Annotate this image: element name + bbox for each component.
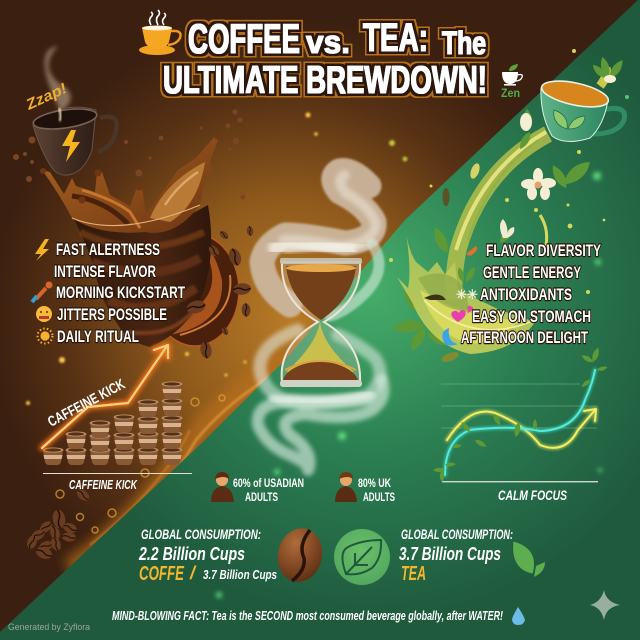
global consumption: tea — [399, 527, 513, 585]
steam above coffee cup — [44, 46, 71, 112]
drifting leaves — [469, 162, 481, 180]
title line one — [188, 15, 486, 62]
icon: face — [36, 306, 52, 322]
title line one: vs. — [306, 24, 350, 60]
right benefits list: GENTLE ENERGY — [483, 263, 581, 282]
stat: USA adults — [211, 472, 304, 504]
coffee droplets — [13, 109, 245, 199]
swirl disc — [151, 234, 239, 346]
global consumption: coffee: COFFE — [139, 563, 184, 585]
intense flavor: INTENSE FLAVOR — [54, 262, 156, 281]
global consumption: coffee: 2.2 Billion Cups — [138, 544, 245, 564]
icon: sparkles: ✳✳ — [456, 287, 478, 302]
stat: USA adults: ADULTS — [245, 490, 278, 504]
left benefits list: JITTERS POSSIBLE — [57, 305, 167, 324]
smoke swirl behind hourglass — [258, 171, 384, 470]
front smoke band over base — [272, 246, 370, 401]
rising arrow — [42, 345, 168, 448]
calm focus chart — [433, 347, 608, 503]
global consumption: coffee: GLOBAL CONSUMPTION: — [141, 526, 261, 542]
title — [163, 15, 487, 102]
stat: USA adults: 60% of USADIAN — [233, 476, 304, 490]
splash droplet tips — [40, 134, 220, 204]
grid lines — [441, 384, 597, 428]
left benefits list: DAILY RITUAL — [57, 327, 139, 346]
watermark: Generated by Zyflora — [8, 622, 90, 632]
green tea cup — [539, 76, 625, 142]
coffee beans pile — [25, 487, 91, 561]
icon: leaf badge — [334, 529, 390, 585]
icon: person — [335, 472, 357, 502]
tea crown splash — [392, 219, 535, 364]
icon: twin leaves — [513, 541, 545, 577]
icon: sparkle — [590, 590, 620, 620]
zen label: Zen — [501, 86, 520, 100]
global consumption: coffee: 3.7 Billion Cups — [203, 567, 277, 582]
icon: zen tea cup — [501, 64, 522, 100]
right benefits list — [442, 241, 601, 347]
golden swoosh along divide — [56, 355, 290, 585]
icon: orange title coffee cup — [139, 10, 181, 55]
icon: water drop — [512, 607, 525, 625]
Zzap label: Zzap! — [23, 80, 70, 114]
left benefits list: MORNING KICKSTART — [56, 283, 185, 302]
chart caption: CALM FOCUS — [498, 487, 567, 503]
chart caption: CAFFEINE KICK — [69, 477, 138, 492]
yellow line — [445, 370, 596, 475]
global consumption: coffee — [138, 526, 277, 585]
right benefits list: ANTIOXIDANTS — [480, 285, 572, 304]
arrow label: CAFFEINE KICK — [45, 376, 128, 431]
icon: sun — [38, 328, 52, 344]
vine leaves — [433, 347, 608, 482]
right benefits list: EASY ON STOMACH — [472, 307, 591, 326]
global consumption: coffee: / — [189, 563, 197, 583]
hourglass — [280, 258, 362, 387]
icon: person — [211, 472, 234, 502]
icon: coffee bean — [273, 524, 327, 586]
splash crown — [42, 135, 218, 233]
title line one: COFFEE — [188, 15, 300, 62]
title: ULTIMATE BREWDOWN! — [163, 59, 487, 102]
flower — [521, 168, 556, 200]
tea leaves and blossoms — [442, 56, 626, 206]
swirl body — [72, 205, 211, 347]
stat: UK adults — [335, 472, 395, 504]
icon: lightning — [35, 239, 49, 261]
title line one: TEA: — [363, 16, 428, 60]
stat: UK adults: 80% UK — [358, 476, 391, 490]
small blossom — [500, 219, 514, 238]
global consumption: tea: GLOBAL CONSUMPTION: — [401, 527, 513, 542]
leaves behind crown — [392, 319, 426, 334]
left benefits list: FAST ALERTNESS — [56, 240, 160, 259]
cyan line — [445, 370, 595, 475]
icon: crescent moon — [442, 328, 458, 346]
left benefits list — [32, 239, 185, 346]
caffeine kick chart — [42, 345, 192, 492]
global consumption: tea: TEA — [401, 563, 426, 585]
icon: hearts — [451, 306, 473, 322]
coffee mug with lightning bolt — [32, 106, 117, 175]
leaves around crown — [430, 225, 452, 255]
global consumption: tea: 3.7 Billion Cups — [399, 544, 501, 564]
tea stream — [454, 68, 606, 300]
baseline — [43, 473, 192, 474]
coffee splash swirl — [40, 134, 254, 359]
stacked cups — [42, 381, 182, 465]
stat: UK adults: ADULTS — [363, 490, 395, 504]
icon: wrench — [32, 282, 52, 302]
coffee beans around swirl — [227, 247, 243, 267]
title line one: The — [442, 25, 486, 61]
